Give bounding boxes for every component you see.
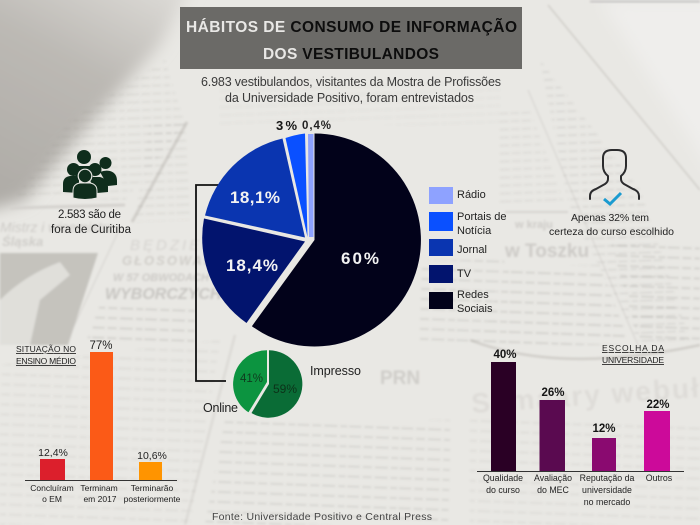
icon: person with check xyxy=(590,150,639,204)
bar chart: university choice: do curso xyxy=(486,485,520,495)
bar chart: high school status: Terminam xyxy=(80,483,118,493)
title: HÁBITOS DE CONSUMO DE INFORMAÇÃO xyxy=(186,18,517,36)
text: course certainty: Apenas 32% tem xyxy=(571,212,649,224)
bar chart: university choice: Reputação da xyxy=(580,473,634,483)
subtitle: da Universidade Positivo, foram entrevistados xyxy=(225,91,474,105)
text: from outside Curitiba xyxy=(51,209,132,236)
pie labels: 3% xyxy=(276,118,297,133)
text: from outside Curitiba: 2.583 são de xyxy=(58,209,121,221)
print vs online pie: 41% xyxy=(240,373,263,385)
bar chart: university choice: Qualidade xyxy=(483,473,523,483)
subtitle xyxy=(201,75,501,105)
pie labels: 18,4% xyxy=(226,256,278,275)
newspaper background: PRN xyxy=(380,368,420,389)
pie labels: 60% xyxy=(341,249,379,268)
print vs online pie xyxy=(233,350,302,418)
text: from outside Curitiba: fora de Curitiba xyxy=(51,224,132,236)
newspaper background: Śląska xyxy=(2,234,43,249)
bar chart: high school status xyxy=(16,340,181,504)
connector from Jornal to print/online pie xyxy=(196,185,226,381)
pie labels: print and online: Online xyxy=(203,401,238,415)
bar chart: high school status: posteriormente xyxy=(124,494,181,504)
newspaper background: w Toszku xyxy=(504,241,589,262)
chart heading: ESCOLHA DA xyxy=(602,343,664,353)
main pie chart xyxy=(202,134,421,346)
newspaper background: w kraju xyxy=(514,219,553,231)
bar chart: high school status: em 2017 xyxy=(83,494,117,504)
bar chart: university choice: no mercado xyxy=(584,497,630,507)
slice: Portais de Notícia 3% xyxy=(286,134,308,237)
bar chart: university choice: 40% xyxy=(493,349,517,361)
chart heading: SITUAÇÃO NO xyxy=(16,344,76,354)
legend: Redes xyxy=(457,289,489,301)
newspaper background: Mistrz i wicemistrz xyxy=(0,219,114,235)
bar chart: university choice: do MEC xyxy=(537,485,570,495)
bar chart: high school status: Terminarão xyxy=(131,483,174,493)
pie labels xyxy=(226,118,379,275)
bar chart: high school status: 12,4% xyxy=(38,447,68,459)
newspaper background: BĘDZIE xyxy=(130,237,202,254)
bar chart: university choice: universidade xyxy=(582,485,632,495)
text: course certainty: certeza do curso escolhido xyxy=(549,226,674,238)
bar chart: high school status: Concluíram xyxy=(30,483,74,493)
bar chart: university choice: 12% xyxy=(592,423,616,435)
text: course certainty xyxy=(549,212,674,238)
legend: Sociais xyxy=(457,303,493,315)
pie labels: 0,4% xyxy=(302,120,331,132)
newspaper background: W 57 OBWODACH xyxy=(113,272,210,284)
source: Fonte: Universidade Positivo e Central Press xyxy=(212,511,432,523)
chart heading: ENSINO MÉDIO xyxy=(16,356,76,366)
legend: Portais de xyxy=(457,211,507,223)
legend: Jornal xyxy=(457,244,487,256)
slice: TV 18,4% xyxy=(202,218,305,323)
bar chart: high school status: 10,6% xyxy=(137,450,167,462)
title: DOS VESTIBULANDOS xyxy=(263,46,439,63)
bar chart: high school status: 77% xyxy=(89,340,113,352)
legend: TV xyxy=(457,268,472,280)
pie labels: print and online: Impresso xyxy=(310,364,361,378)
chart heading: UNIVERSIDADE xyxy=(602,355,664,365)
slice: Online 41% xyxy=(233,350,267,412)
chart heading xyxy=(602,343,664,365)
chart heading xyxy=(16,344,76,366)
legend: Notícia xyxy=(457,225,492,237)
icon: group of people xyxy=(63,150,117,200)
slice: Jornal 18,1% xyxy=(205,138,305,238)
pie labels: print and online xyxy=(203,364,361,415)
title xyxy=(180,7,522,69)
bar chart: university choice: 26% xyxy=(541,387,565,399)
newspaper background: GŁOSOWANIE xyxy=(122,253,232,268)
print vs online pie: 59% xyxy=(273,382,297,396)
bar chart: university choice xyxy=(477,343,684,507)
bar chart: university choice: 22% xyxy=(646,399,670,411)
pie labels: 18,1% xyxy=(230,188,280,207)
slice: Redes Sociais 60% xyxy=(252,134,421,346)
slice: Impresso 59% xyxy=(252,350,302,418)
slice: Rádio 0,4% xyxy=(308,134,314,237)
legend: Rádio xyxy=(457,189,486,201)
subtitle: 6.983 vestibulandos, visitantes da Mostra de Profissões xyxy=(201,75,501,89)
bar chart: high school status: o EM xyxy=(42,494,62,504)
newspaper background: WYBORCZYCH xyxy=(105,286,222,303)
legend xyxy=(429,187,507,315)
bar chart: university choice: Avaliação xyxy=(534,473,572,483)
bar chart: university choice: Outros xyxy=(646,473,673,483)
